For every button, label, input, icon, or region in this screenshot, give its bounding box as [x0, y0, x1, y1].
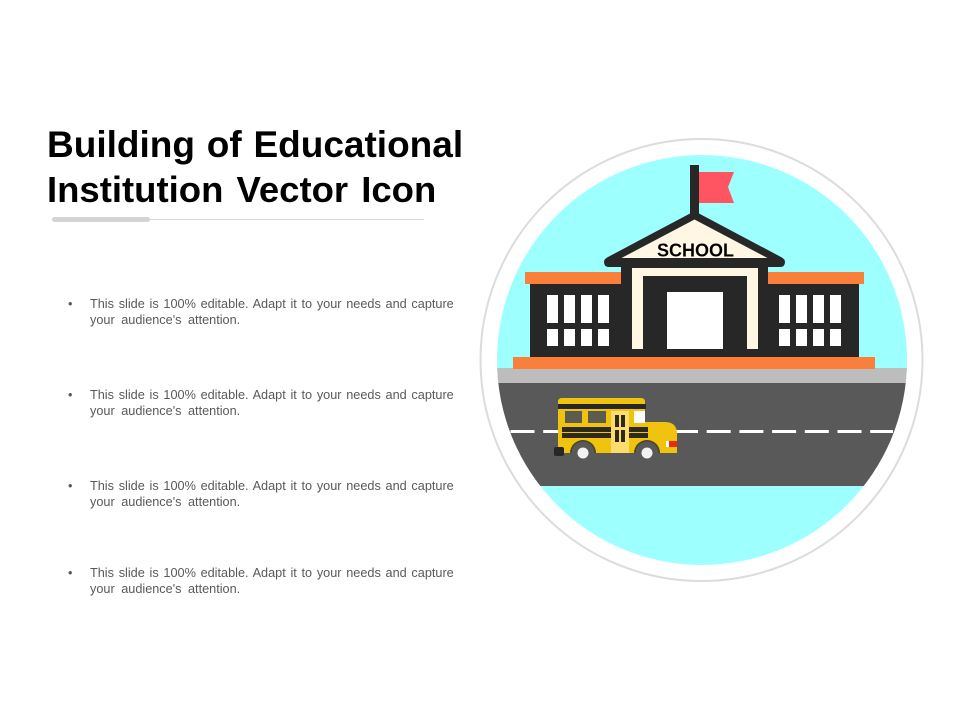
gable roof [604, 214, 785, 267]
school building [513, 214, 875, 369]
right windows [779, 295, 841, 346]
title: Institution Vector Icon [47, 169, 436, 210]
door [667, 292, 723, 349]
base [513, 357, 875, 369]
side roofs [525, 272, 621, 284]
school illustration [480, 138, 924, 582]
bullet text 4: your audience's attention. [90, 582, 240, 596]
title: Building of Educational [47, 124, 463, 165]
central block [621, 262, 768, 357]
sky circle [497, 155, 907, 565]
bus windows [565, 411, 582, 423]
bus door [611, 411, 629, 453]
school sign: SCHOOL [657, 240, 734, 260]
bullet text 1: your audience's attention. [90, 313, 240, 327]
bullet text 3 [68, 479, 454, 509]
bullet text 2: • [68, 388, 72, 402]
bullet text 2: your audience's attention. [90, 404, 240, 418]
wings [530, 284, 859, 357]
bullet text 3: your audience's attention. [90, 495, 240, 509]
bullet text 2: This slide is 100% editable. Adapt it to your needs and capture [90, 388, 454, 402]
flag [690, 165, 734, 217]
bullet text 4: This slide is 100% editable. Adapt it to your needs and capture [90, 566, 454, 580]
bullet text 1: This slide is 100% editable. Adapt it to your needs and capture [90, 297, 454, 311]
side stripes [562, 427, 648, 438]
bullet text 4 [68, 566, 454, 596]
outer ring [480, 139, 922, 581]
bullet text 3: This slide is 100% editable. Adapt it to your needs and capture [90, 479, 454, 493]
rear bumper [554, 447, 564, 456]
left windows [547, 295, 609, 346]
bullet text 2 [68, 388, 454, 418]
title [47, 124, 463, 210]
bullet text 3: • [68, 479, 72, 493]
headlight [666, 441, 670, 447]
school bus [554, 398, 677, 464]
wheels [570, 440, 660, 464]
entrance frame [632, 268, 758, 349]
roof stripe [558, 404, 646, 409]
bullet text 4: • [68, 566, 72, 580]
road and pavement [490, 368, 915, 486]
bus body [558, 398, 677, 453]
bullet text 1 [68, 297, 454, 327]
road dashes [510, 430, 893, 433]
bullet text 1: • [68, 297, 72, 311]
title divider [52, 217, 424, 222]
